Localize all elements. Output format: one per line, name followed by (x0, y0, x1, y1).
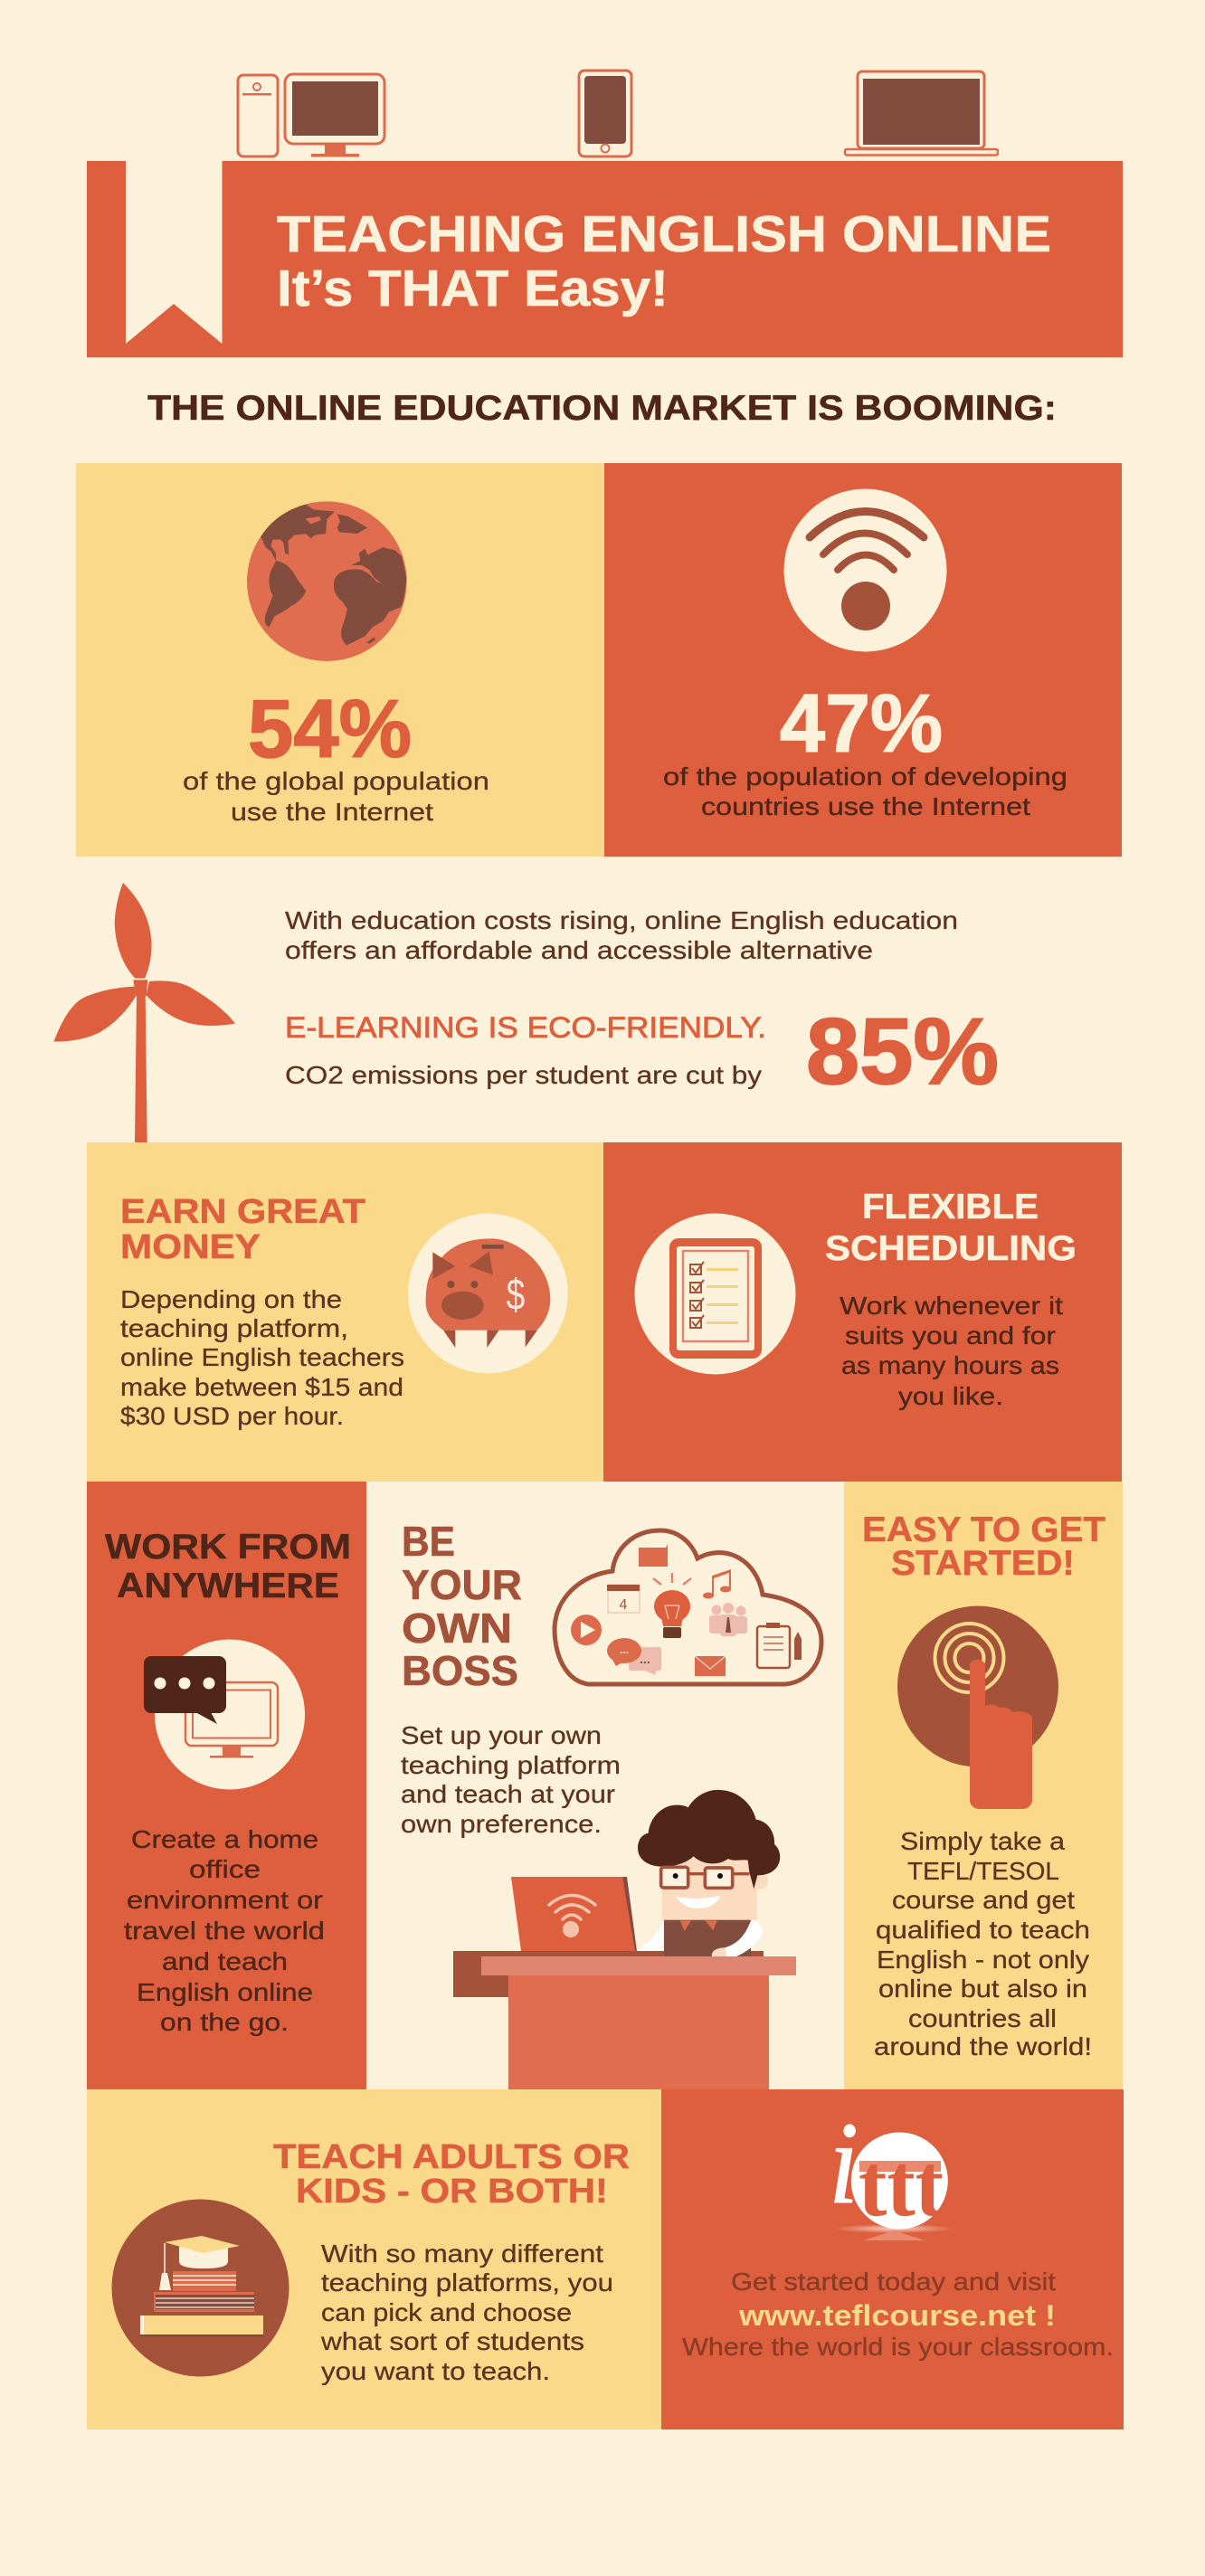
text: office (189, 1855, 261, 1883)
teacher (636, 1790, 780, 1961)
desk back (453, 1951, 764, 1956)
right arm (725, 1920, 763, 1960)
music notes (703, 1569, 731, 1599)
panel: earn great money (87, 1142, 603, 1482)
chat bubbles: ... (620, 1643, 629, 1656)
text: around the world! (874, 2032, 1092, 2060)
text: English - not only (877, 1946, 1089, 1974)
link: website: www.teflcourse.net ! (738, 2299, 1056, 2332)
stat: 54%: 54% (248, 684, 412, 775)
icon: wifi (783, 488, 946, 651)
calendar: 4 (620, 1597, 628, 1613)
icon: books and graduation cap (112, 2200, 289, 2377)
text: teaching platforms, you (321, 2268, 613, 2297)
title (277, 205, 1051, 317)
text: education costs: offers an affordable and accessible alternative (285, 936, 873, 964)
play button (571, 1615, 602, 1645)
text: Work whenever it (840, 1292, 1063, 1320)
text: course and get (892, 1886, 1075, 1914)
icon: globe (247, 501, 407, 661)
desk body (508, 1975, 769, 2091)
text (120, 1285, 404, 1430)
title banner (87, 161, 1123, 357)
heading: EARN GREAT (120, 1193, 365, 1231)
heading: OWN (402, 1605, 512, 1652)
stat: 85%: 85% (806, 999, 999, 1104)
icon: wind turbine (53, 883, 235, 1142)
folder (639, 1544, 668, 1567)
desk top (481, 1956, 796, 1975)
text (320, 2240, 613, 2385)
panel: work from anywhere (87, 1482, 366, 2091)
text: global population caption (183, 767, 489, 826)
title: TEACHING ENGLISH ONLINE (277, 205, 1051, 263)
smile (676, 1896, 721, 1908)
icon: laptop (845, 71, 998, 156)
icon: finger tapping target (897, 1606, 1058, 1809)
icon: piggy bank: $ (507, 1270, 525, 1319)
title: It’s THAT Easy! (277, 260, 669, 317)
heading: TEACH ADULTS OR (273, 2138, 630, 2176)
text: make between $15 and (120, 1373, 403, 1401)
text: you want to teach. (321, 2357, 550, 2385)
text: as many hours as (841, 1351, 1059, 1379)
text: CO2 emissions: CO2 emissions per student are cut by (285, 1061, 762, 1089)
text (401, 1721, 621, 1838)
heading (862, 1511, 1105, 1583)
text: teaching platform (401, 1751, 621, 1779)
glasses (661, 1867, 733, 1888)
panel: call to action (661, 2089, 1124, 2429)
text: online English teachers (120, 1343, 404, 1371)
heading: MONEY (120, 1228, 261, 1266)
text: Set up your own (401, 1721, 602, 1749)
text: can pick and choose (321, 2298, 572, 2326)
icon: piggy bank (408, 1214, 568, 1373)
logo: ittt (834, 2124, 952, 2240)
hair (638, 1790, 780, 1889)
text: on the go. (160, 2008, 289, 2036)
text: Simply take a (900, 1827, 1065, 1855)
icon: tablet (579, 71, 631, 156)
text: $30 USD per hour. (120, 1402, 344, 1430)
text: suits you and for (845, 1321, 1056, 1350)
text (124, 1825, 325, 2036)
chat bubbles: ... (640, 1652, 650, 1666)
heading: EASY TO GET (862, 1511, 1105, 1549)
icon: tablet checklist (635, 1214, 796, 1375)
stat: 47%: 47% (780, 678, 943, 770)
text: what sort of students (320, 2327, 584, 2355)
text: global population caption: use the Internet (231, 798, 433, 826)
section heading: THE ONLINE EDUCATION MARKET IS BOOMING: (147, 389, 1057, 428)
heading: FLEXIBLE (862, 1188, 1039, 1226)
text: Create a home (131, 1825, 318, 1853)
heading: eco-friendly: E-LEARNING IS ECO-FRIENDLY. (285, 1011, 766, 1044)
panel: global population stat (76, 463, 604, 857)
text (840, 1292, 1063, 1410)
heading: BE (402, 1518, 455, 1565)
text: get started: Get started today and visit (731, 2268, 1056, 2296)
text: environment or (127, 1886, 323, 1914)
heading (273, 2138, 630, 2211)
text: countries all (908, 2004, 1057, 2032)
text: education costs (285, 906, 958, 964)
envelope (695, 1656, 726, 1676)
panel: flexible scheduling (603, 1142, 1122, 1482)
heading: STARTED! (891, 1544, 1075, 1583)
heading (402, 1518, 522, 1694)
illustration: teacher at desk with laptop (453, 1790, 796, 2091)
text: own preference. (401, 1810, 602, 1838)
text: English online (137, 1978, 313, 2006)
text: TEFL/TESOL (907, 1857, 1059, 1885)
panel: be your own boss (401, 1518, 821, 1838)
text: and teach at your (401, 1780, 615, 1808)
text: developing countries caption: countries use the Internet (701, 792, 1030, 820)
logo: ittt: i (829, 2098, 859, 2229)
heading: BOSS (402, 1647, 518, 1694)
chat bubbles (607, 1638, 661, 1675)
text: qualified to teach (876, 1916, 1090, 1944)
text (874, 1827, 1092, 2060)
clipboard and pencil (757, 1623, 802, 1668)
panel: easy to get started (844, 1482, 1123, 2089)
light bulb (653, 1573, 691, 1638)
heading (120, 1193, 365, 1266)
text: and teach (162, 1947, 288, 1975)
desk side shadow (453, 1951, 509, 1997)
text: developing countries caption (663, 762, 1067, 820)
text: you like. (898, 1382, 1003, 1410)
heading: SCHEDULING (825, 1229, 1077, 1268)
icon: desktop computer (238, 74, 384, 157)
text: Depending on the (120, 1285, 342, 1313)
laptop (511, 1877, 637, 1951)
text: tagline: Where the world is your classroom. (682, 2333, 1114, 2361)
text: global population caption: of the global population (183, 767, 489, 795)
heading: YOUR (402, 1561, 522, 1608)
text: With so many different (321, 2240, 603, 2268)
heading: WORK FROM (105, 1528, 351, 1567)
icon: monitor with chat bubble (144, 1639, 305, 1789)
panel: developing countries stat (604, 463, 1122, 857)
text: online but also in (878, 1975, 1087, 2003)
text: education costs: With education costs rising, online English education (285, 906, 958, 934)
icon: cloud of teaching tools (555, 1530, 821, 1684)
heading: KIDS - OR BOTH! (296, 2173, 608, 2211)
text: teaching platform, (120, 1314, 348, 1342)
heading (105, 1528, 351, 1605)
calendar (607, 1585, 640, 1613)
icon: bookmark ribbon (126, 161, 223, 344)
text: developing countries caption: of the population of developing (663, 762, 1067, 791)
heading: ANYWHERE (117, 1567, 339, 1605)
heading (825, 1188, 1077, 1268)
logo: ittt: ttt (859, 2135, 944, 2235)
text: travel the world (124, 1917, 325, 1945)
panel: teach adults or kids (87, 2089, 661, 2429)
people (709, 1603, 747, 1636)
